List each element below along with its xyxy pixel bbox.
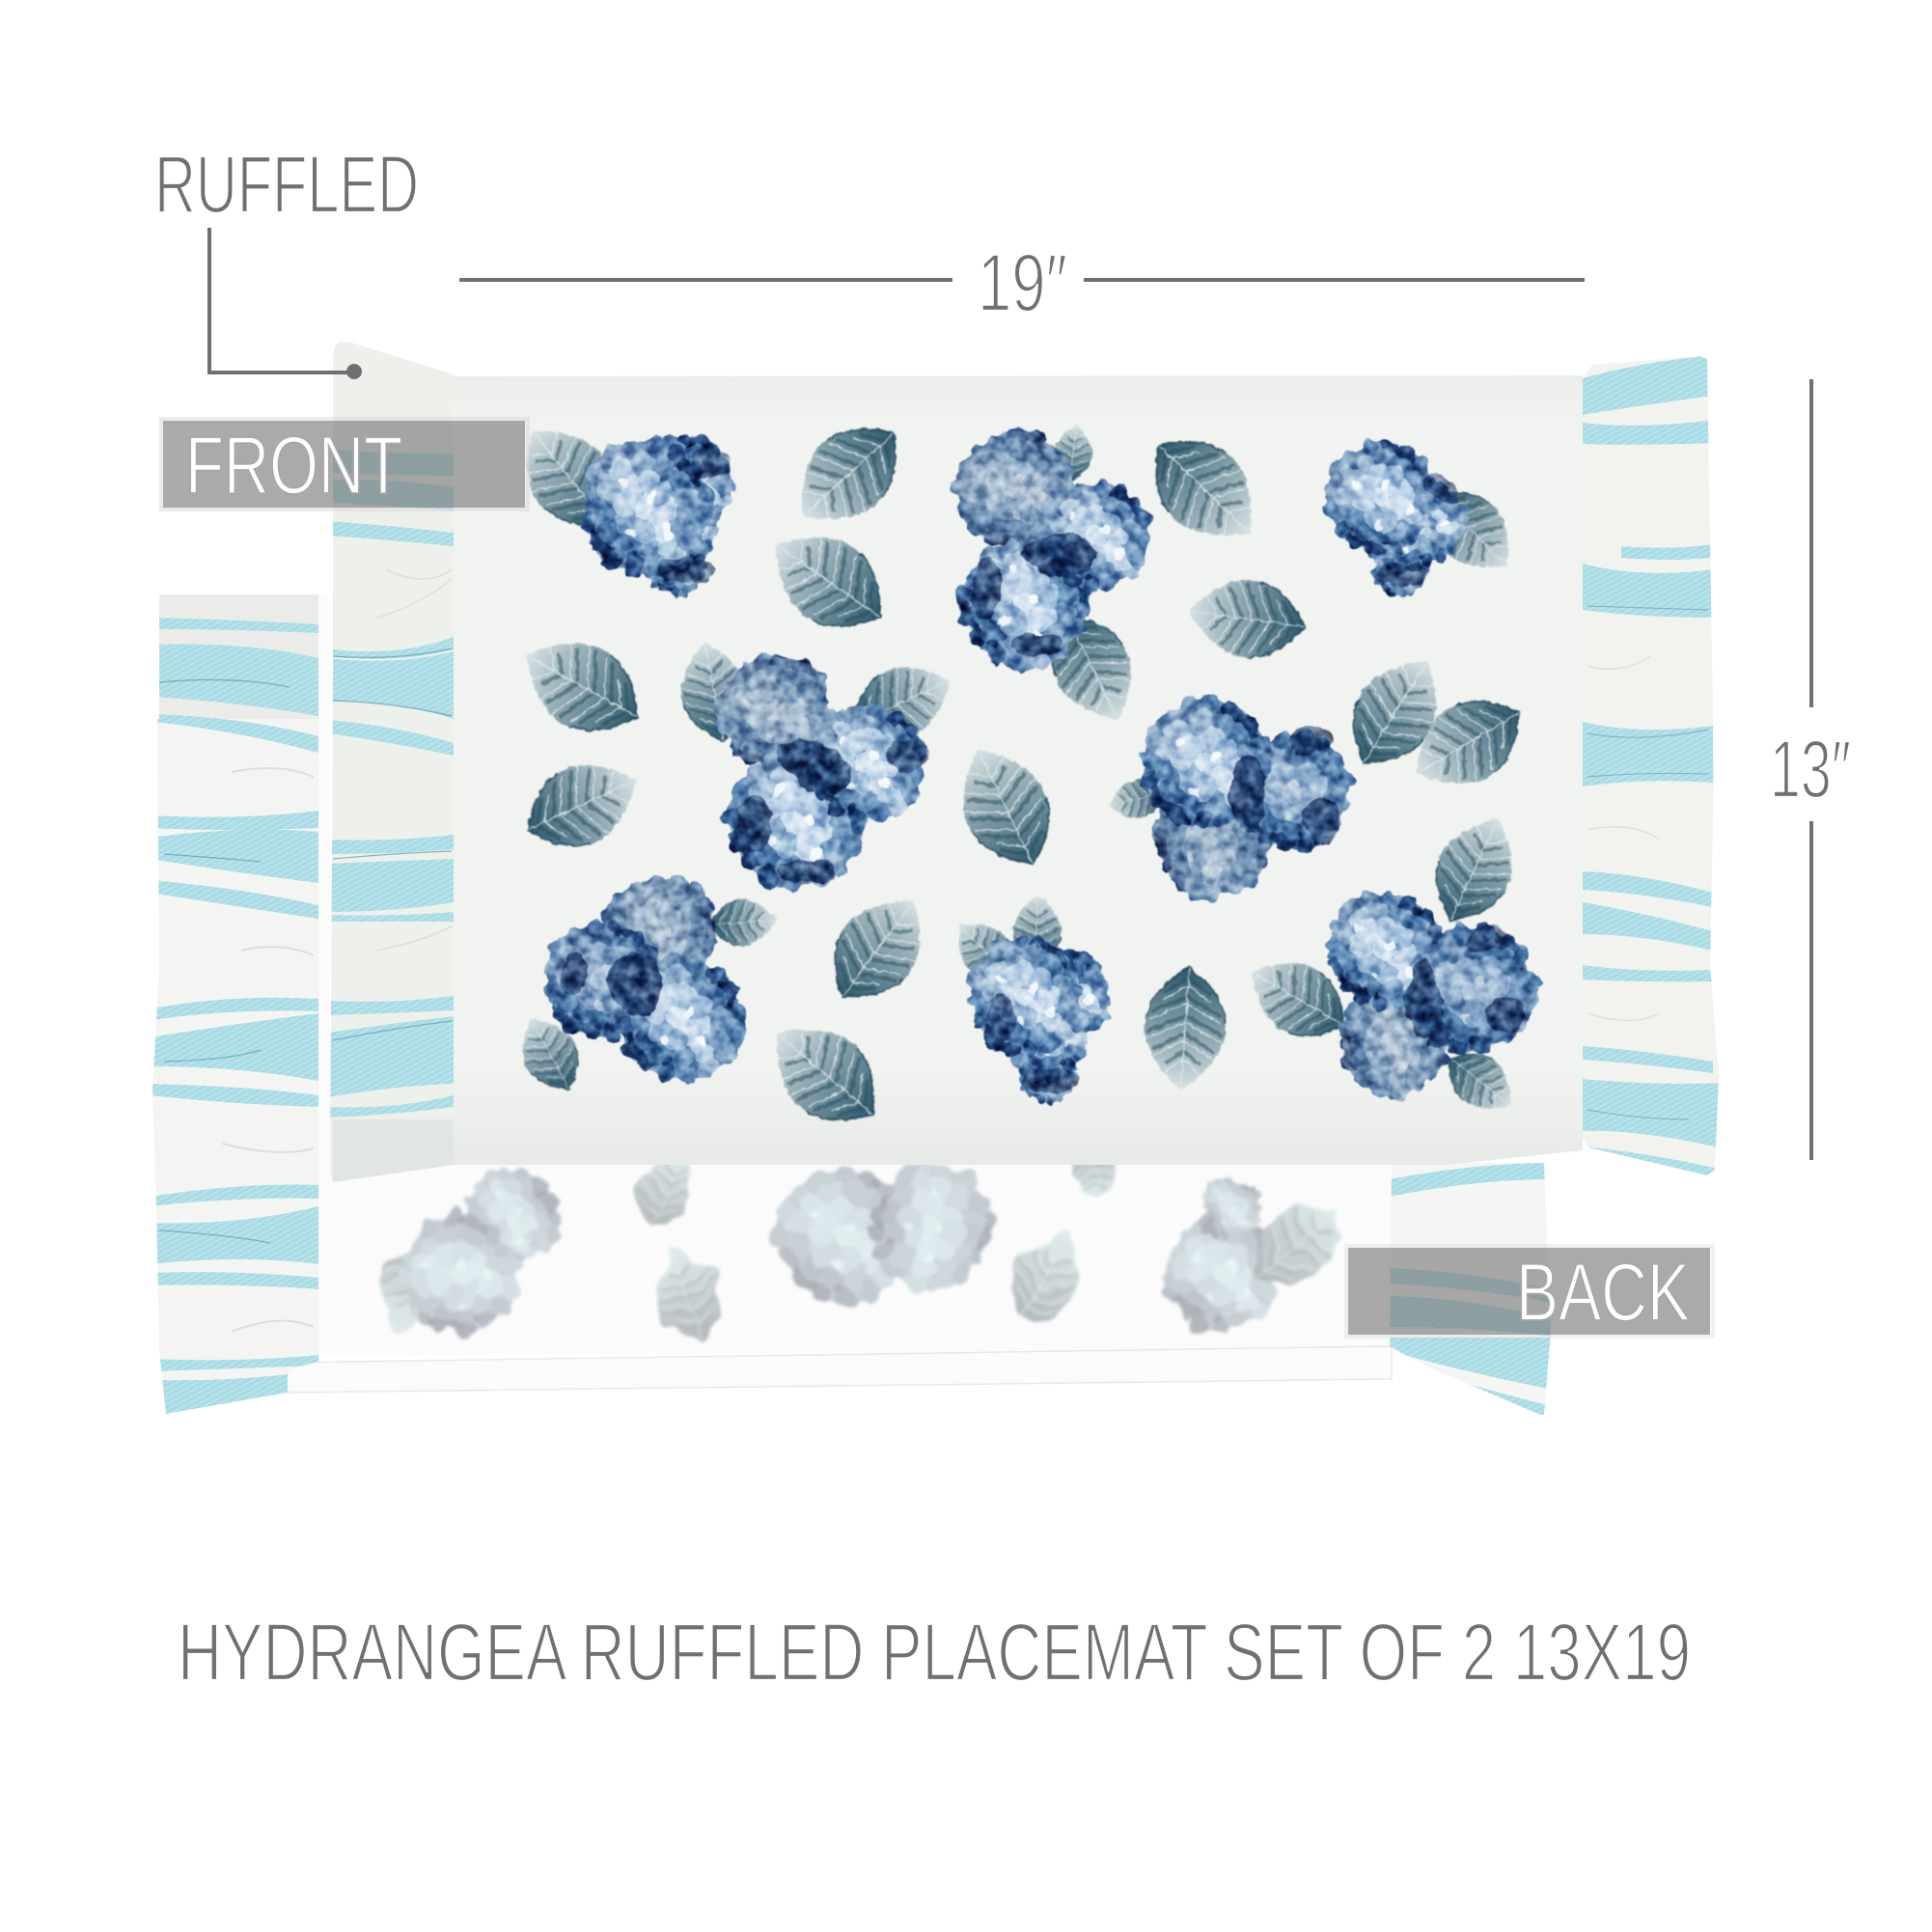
printed leaves xyxy=(502,403,1539,1146)
hydrangea 1 xyxy=(567,419,747,605)
hydrangea 6 xyxy=(532,847,760,1098)
back right ruffle xyxy=(1390,1163,1551,1415)
leader line with dot xyxy=(209,228,362,379)
panel: back placemat xyxy=(145,589,1563,1419)
dimension: width 19 inches: 19″ xyxy=(978,237,1067,328)
hydrangea 4 xyxy=(701,639,937,916)
hydrangea 3 xyxy=(1311,425,1479,602)
back fabric body xyxy=(320,1158,1392,1356)
hydrangea 8 xyxy=(1313,884,1550,1123)
label: back xyxy=(1346,1246,1713,1338)
panel: front placemat xyxy=(328,338,1723,1187)
hydrangea 2 xyxy=(932,411,1158,696)
back hem xyxy=(287,1346,1392,1393)
label: back: BACK xyxy=(1516,1247,1690,1338)
front main fabric xyxy=(454,375,1583,1165)
back left ruffle xyxy=(152,594,318,1414)
dimension: height 13 inches: 13″ xyxy=(1770,724,1851,814)
label: front: FRONT xyxy=(185,420,402,511)
label: ruffled: RUFFLED xyxy=(154,139,419,230)
hydrangea 7 xyxy=(960,927,1125,1108)
hydrangea 5 xyxy=(1130,689,1363,925)
callout: ruffled xyxy=(154,139,419,379)
front right ruffle xyxy=(1578,352,1723,1182)
front left ruffle xyxy=(328,338,458,1187)
faded show-through hydrangea print xyxy=(368,1136,1362,1358)
